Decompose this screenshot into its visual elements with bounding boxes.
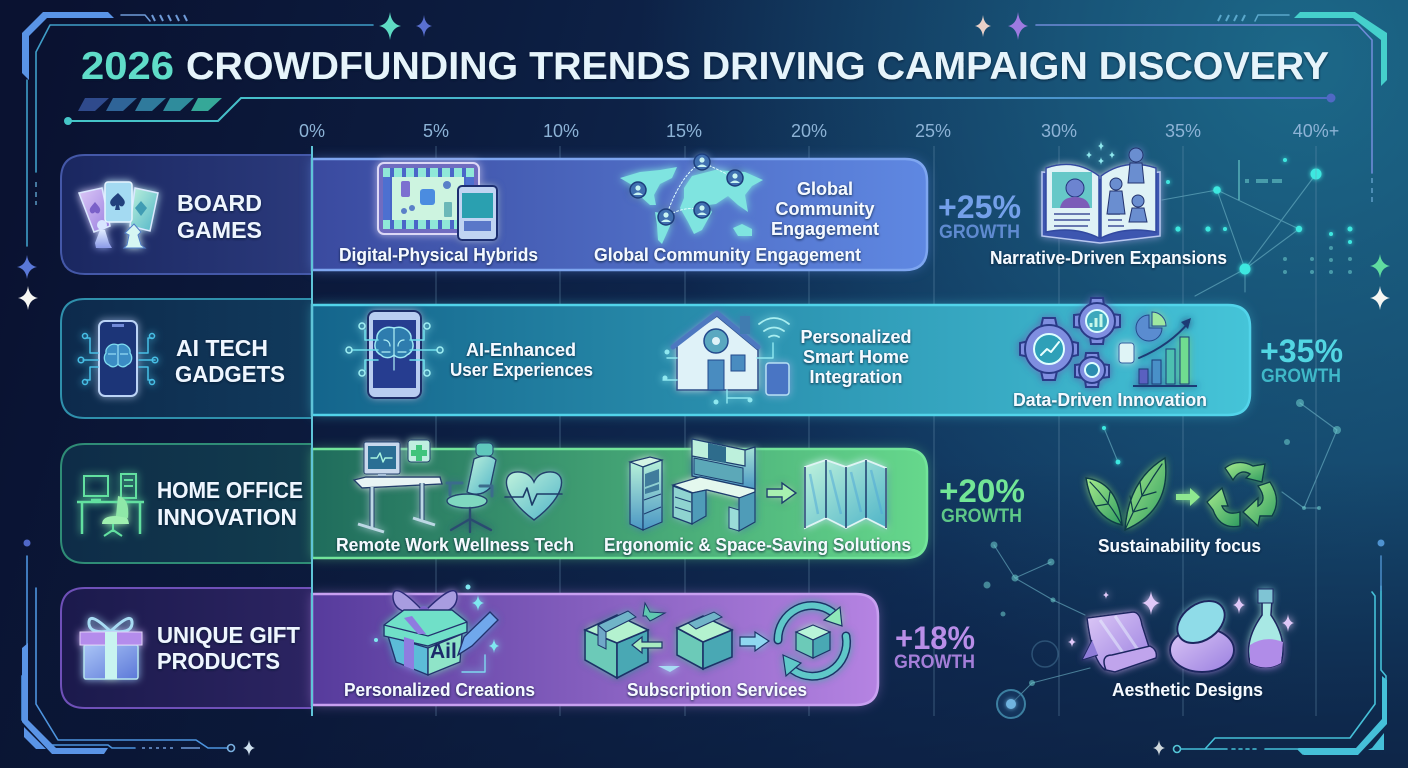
label: personalized smart home integration — [800, 327, 912, 387]
icon: gears and growth chart — [1020, 298, 1197, 387]
axis: percentage scale and grid: 40%+ — [1293, 121, 1339, 141]
axis: percentage scale and grid: 15% — [666, 121, 702, 141]
growth: +18% — [894, 620, 975, 673]
label: board games: BOARD — [177, 190, 262, 216]
label: global community engagement: Global Community Engagement — [594, 245, 861, 265]
label: unique gift products: UNIQUE GIFT — [157, 622, 300, 648]
row: board games — [61, 141, 1227, 274]
axis: percentage scale and grid: 20% — [791, 121, 827, 141]
growth: +35% — [1260, 333, 1343, 387]
icon: AI phone with brain — [346, 311, 443, 398]
icon: wellness desk, chair and heart — [354, 440, 562, 532]
label: sustainability focus: Sustainability focus — [1098, 536, 1261, 556]
label: AI-enhanced user experiences: User Experiences — [450, 360, 593, 380]
icon: world map with community avatars — [620, 154, 763, 244]
row: AI tech gadgets — [61, 298, 1343, 418]
label: ergonomic and space-saving solutions: Ergonomic & Space-Saving Solutions — [604, 535, 911, 555]
row: unique gift products — [61, 584, 1294, 708]
growth: +35%: GROWTH — [1261, 366, 1341, 387]
title underline with progress blocks — [64, 94, 1336, 125]
title: 2026 — [81, 45, 174, 88]
growth: +25% — [938, 189, 1021, 243]
category panel: AI tech gadgets — [61, 299, 312, 418]
label: remote work wellness tech: Remote Work Wellness Tech — [336, 535, 574, 555]
label: personalized creations: Personalized Creations — [344, 680, 535, 700]
growth: +20%: GROWTH — [941, 506, 1022, 527]
icon: subscription boxes and cycle — [585, 603, 847, 678]
label: aesthetic designs: Aesthetic Designs — [1112, 680, 1263, 700]
icon: smart home — [662, 313, 789, 404]
label: AI tech gadgets: GADGETS — [175, 361, 285, 387]
axis: percentage scale and grid: 0% — [299, 121, 325, 141]
title: CROWDFUNDING TRENDS DRIVING CAMPAIGN DISCOVERY — [186, 45, 1329, 88]
growth: +35%: +35% — [1260, 333, 1343, 369]
label: home office innovation: INNOVATION — [157, 504, 297, 530]
icon: personalized gift box with pencil — [374, 584, 499, 675]
label: AI tech gadgets — [175, 335, 285, 387]
growth: +20%: +20% — [939, 473, 1025, 509]
icon: digital-physical board and tablet — [378, 163, 497, 240]
axis: percentage scale and grid: 35% — [1165, 121, 1201, 141]
icon: gift box — [80, 618, 142, 679]
label: AI-enhanced user experiences: AI-Enhanced — [466, 340, 576, 360]
icon: cards and chess pieces — [79, 182, 158, 248]
icon: open storybook with astronauts — [1042, 141, 1160, 243]
label: global community engagement stacked: Global — [797, 179, 853, 199]
label: narrative-driven expansions: Narrative-Driven Expansions — [990, 248, 1227, 268]
growth: +25%: GROWTH — [939, 222, 1020, 243]
icon: leaves, arrow and recycling loop — [1086, 458, 1277, 530]
category panel: unique gift products — [61, 588, 312, 708]
label: subscription services: Subscription Services — [627, 680, 807, 700]
label: AI tech gadgets: AI TECH — [176, 335, 268, 361]
bar: home office innovation +20% — [312, 439, 927, 558]
label: unique gift products — [157, 622, 300, 674]
icon: phone with brain circuit — [78, 321, 158, 396]
axis: percentage scale and grid: 5% — [423, 121, 449, 141]
growth: +18%: GROWTH — [894, 652, 975, 673]
label: personalized smart home integration: Integration — [810, 367, 902, 387]
zero axis line — [311, 146, 313, 716]
background network of glowing nodes — [984, 158, 1352, 718]
label: board games — [177, 190, 262, 243]
category panel: board games — [61, 155, 312, 274]
label: data-driven innovation: Data-Driven Innovation — [1013, 390, 1207, 410]
bar: AI tech gadgets +35% — [312, 298, 1250, 415]
growth: +18%: +18% — [895, 620, 975, 656]
axis: percentage scale and grid — [299, 121, 1339, 716]
label: global community engagement stacked: Community — [776, 199, 874, 219]
axis: percentage scale and grid: 10% — [543, 121, 579, 141]
icon: ergonomic furniture and folding screen — [630, 439, 886, 531]
label: digital-physical hybrids: Digital-Physical Hybrids — [339, 245, 538, 265]
label: home office innovation — [157, 477, 303, 530]
growth: +25%: +25% — [938, 189, 1021, 225]
label: AI-enhanced user experiences — [450, 340, 593, 380]
label: home office innovation: HOME OFFICE — [157, 477, 303, 503]
label: global community engagement stacked: Engagement — [771, 219, 879, 239]
axis: percentage scale and grid: 25% — [915, 121, 951, 141]
category panel: home office innovation — [61, 444, 312, 563]
icon: desk, monitor and chair — [77, 474, 144, 536]
row: home office innovation — [61, 439, 1277, 563]
bar: unique gift products +18% — [312, 584, 878, 705]
label: board games: GAMES — [177, 217, 262, 243]
icon: personalized gift box with pencil: Ail — [430, 640, 457, 663]
label: global community engagement stacked — [771, 179, 879, 239]
label: personalized smart home integration: Personalized — [800, 327, 912, 347]
growth: +20% — [939, 473, 1025, 527]
axis: percentage scale and grid: 30% — [1041, 121, 1077, 141]
label: personalized smart home integration: Smart Home — [803, 347, 909, 367]
bar: board games +25% — [312, 154, 927, 270]
icon: aesthetic stand, mirror and bottle — [1068, 589, 1294, 672]
label: unique gift products: PRODUCTS — [157, 648, 280, 674]
